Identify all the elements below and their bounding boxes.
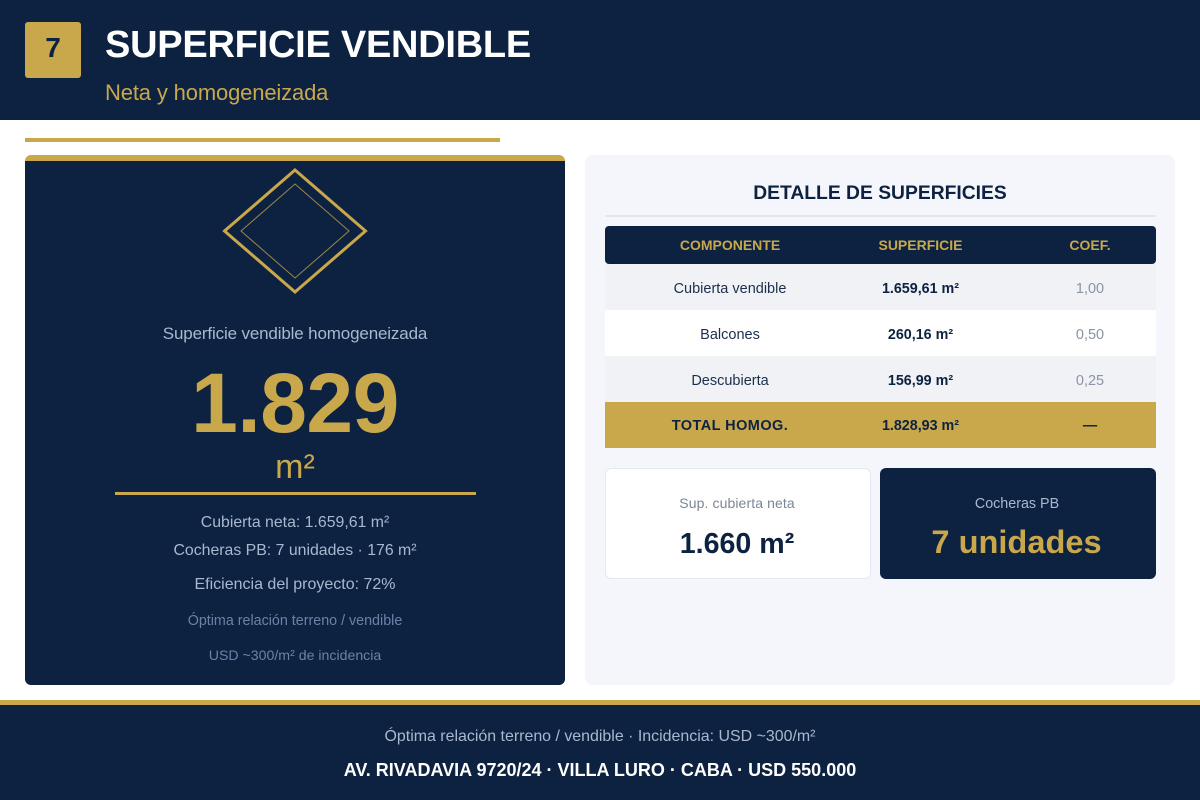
table header xyxy=(605,226,1156,264)
table row: total: — xyxy=(1083,418,1097,434)
table header: COEF. xyxy=(1069,237,1111,253)
footer address: AV. RIVADAVIA 9720/24 · VILLA LURO · CABA · USD 550.000 xyxy=(344,760,856,780)
label: homogenized area: Superficie vendible homogeneizada xyxy=(163,324,427,343)
table row: total: TOTAL HOMOG. xyxy=(672,418,788,434)
card: net covered area xyxy=(605,468,871,579)
card value: 7 unidades xyxy=(931,523,1102,560)
header band xyxy=(0,0,1200,120)
detail: net covered: Cubierta neta: 1.659,61 m² xyxy=(201,514,389,531)
card value: 1.660 m² xyxy=(680,528,794,560)
table header: SUPERFICIE xyxy=(878,237,962,253)
title: SUPERFICIE VENDIBLE xyxy=(105,24,531,66)
card: garages xyxy=(880,468,1156,579)
footer band xyxy=(0,700,1200,800)
table row: descubierta xyxy=(605,356,1156,402)
table row: descubierta: Descubierta xyxy=(691,373,769,389)
table row: balcones: 260,16 m² xyxy=(888,327,953,343)
table row: cubierta: 1,00 xyxy=(1076,281,1104,297)
subtitle: Neta y homogeneizada xyxy=(105,80,328,105)
detail: efficiency: Eficiencia del proyecto: 72% xyxy=(194,576,396,593)
divider xyxy=(115,492,476,495)
detail: garages: Cocheras PB: 7 unidades · 176 m² xyxy=(173,542,417,559)
table row: balcones: 0,50 xyxy=(1076,327,1104,343)
card label: Cocheras PB xyxy=(975,496,1059,512)
unit: m² xyxy=(275,448,315,486)
table row: cubierta: Cubierta vendible xyxy=(674,281,786,297)
note: incidence: USD ~300/m² de incidencia xyxy=(209,647,381,663)
footer note: Óptima relación terreno / vendible · Incidencia: USD ~300/m² xyxy=(385,728,815,745)
section number badge xyxy=(25,22,81,78)
card label: Sup. cubierta neta xyxy=(679,495,795,511)
section number badge: 7 xyxy=(45,32,61,63)
table row: balcones: Balcones xyxy=(700,327,760,343)
heading rule xyxy=(605,215,1156,217)
icon: double diamond xyxy=(222,168,368,294)
table row: total: 1.828,93 m² xyxy=(882,418,959,434)
table row: cubierta xyxy=(605,264,1156,310)
note: ratio: Óptima relación terreno / vendible xyxy=(188,613,402,629)
big number: 1.829 xyxy=(191,356,399,450)
panel: headline surface xyxy=(25,155,565,685)
panel heading: DETALLE DE SUPERFICIES xyxy=(753,183,1007,204)
gold accent rule xyxy=(25,138,500,142)
table header: COMPONENTE xyxy=(680,237,780,253)
table row: balcones xyxy=(605,310,1156,356)
panel: surface details xyxy=(585,155,1175,685)
table row: descubierta: 0,25 xyxy=(1076,373,1104,389)
table row: cubierta: 1.659,61 m² xyxy=(882,281,959,297)
table row: total xyxy=(605,402,1156,448)
table row: descubierta: 156,99 m² xyxy=(888,373,953,389)
